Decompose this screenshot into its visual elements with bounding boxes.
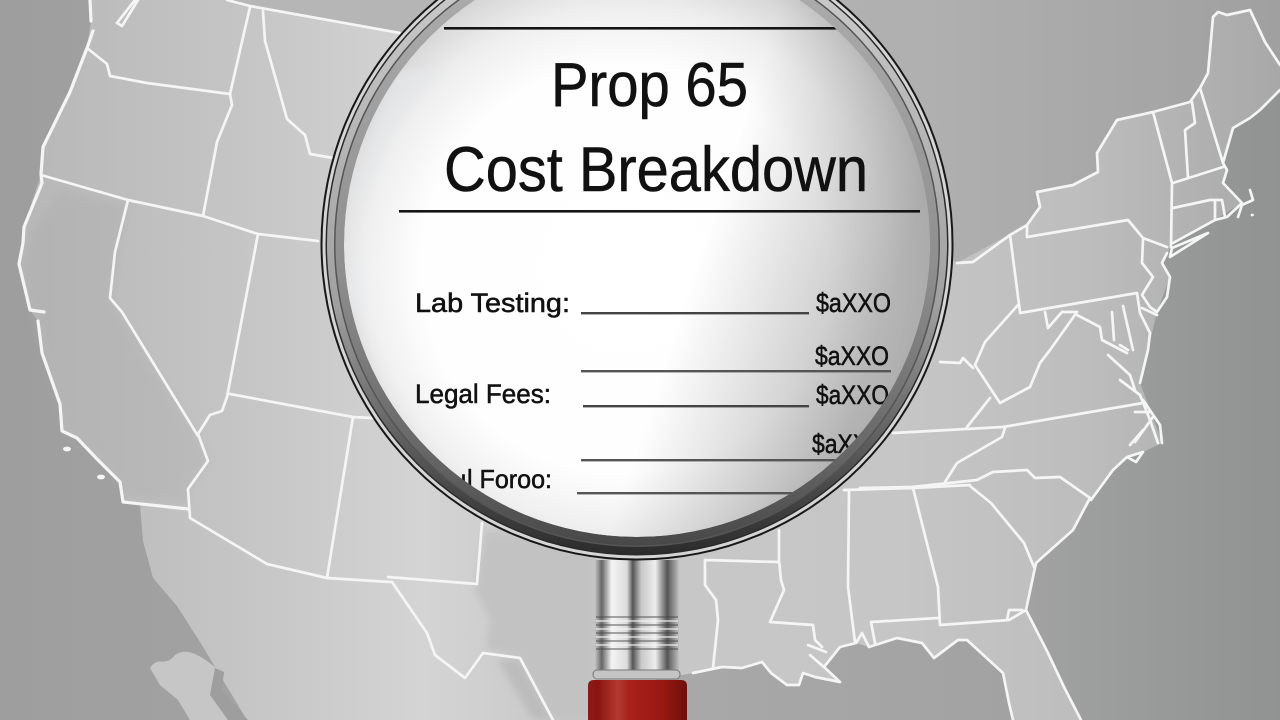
top rule	[444, 27, 842, 30]
California and Oregon shading	[24, 190, 208, 505]
metal ferrule	[595, 560, 679, 676]
Mexico and Baja shapes	[150, 530, 595, 720]
left reflection arc	[389, 72, 402, 88]
metal collar	[593, 670, 680, 679]
lens with cost sheet	[340, 0, 930, 560]
title: Prop 65	[551, 51, 748, 120]
row: legal fees: $aXXO	[816, 380, 889, 410]
glass surface	[344, 0, 930, 537]
row: blank line: $aXXO	[815, 341, 889, 371]
magnifying glass rim	[320, 0, 954, 560]
row: lab testing: $aXXO	[816, 288, 891, 318]
row: other fees: ıl Foroo:	[460, 464, 552, 494]
Canada band	[227, 0, 1280, 263]
lower-left lens shadow	[340, 300, 520, 560]
title rule	[399, 210, 920, 213]
row: partial value: $aXXO	[812, 429, 886, 459]
threaded grooves	[596, 617, 678, 649]
red grip	[588, 680, 687, 720]
magnifying glass handle	[588, 560, 687, 720]
row: legal fees: Legal Fees:	[415, 379, 551, 409]
row: lab testing: Lab Testing:	[415, 288, 570, 318]
row: legal fees	[416, 383, 888, 409]
subtitle: Cost Breakdown	[444, 135, 868, 205]
row: lab testing	[417, 292, 890, 318]
Channel Islands	[63, 447, 105, 479]
right shadow	[639, 18, 930, 536]
